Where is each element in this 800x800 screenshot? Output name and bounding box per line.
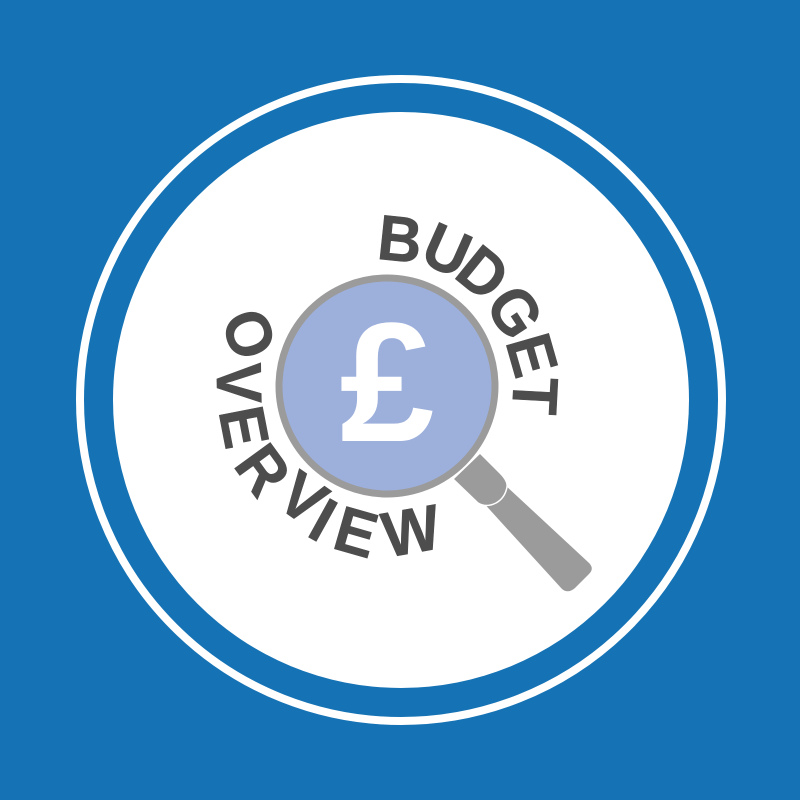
heading: BUDGET: [374, 201, 572, 416]
magnifier handle: [470, 471, 592, 591]
inner white disc: [113, 112, 689, 688]
heading: OVERVIEW: V: [266, 457, 340, 540]
heading: OVERVIEW: W: [377, 491, 446, 572]
heading: BUDGET: U: [412, 209, 481, 292]
heading: OVERVIEW: E: [204, 400, 283, 454]
heading: BUDGET: D: [443, 232, 522, 315]
magnifier collar: [453, 453, 507, 506]
icon: magnifying glass: [279, 278, 592, 591]
heading: OVERVIEW: O: [207, 300, 290, 369]
heading: BUDGET: G: [472, 273, 558, 352]
heading: BUDGET: T: [498, 376, 571, 416]
magnifier lens: [279, 278, 495, 494]
heading: OVERVIEW: E: [326, 492, 385, 573]
heading: BUDGET: B: [374, 201, 426, 277]
heading: OVERVIEW: [202, 300, 446, 573]
heading: OVERVIEW: V: [202, 362, 275, 404]
outer white ring: [80, 79, 722, 721]
heading: OVERVIEW: R: [221, 431, 305, 509]
icon: pound sign: £: [340, 288, 434, 478]
heading: OVERVIEW: I: [298, 485, 348, 556]
heading: BUDGET: E: [491, 326, 572, 385]
